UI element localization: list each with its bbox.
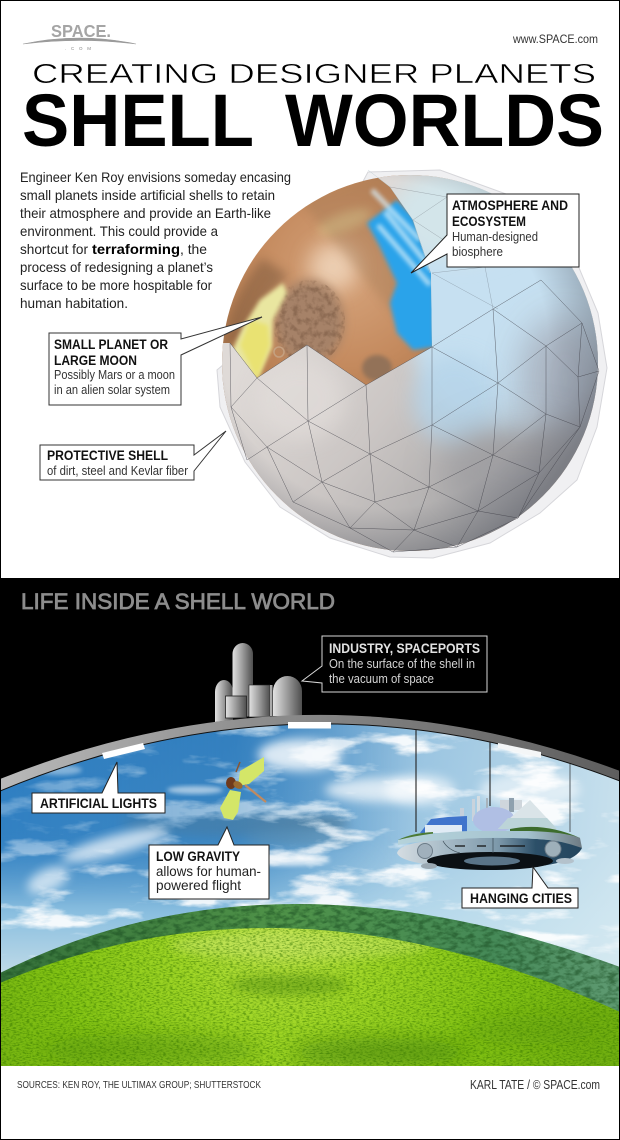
callout: industry, spaceports: INDUSTRY, SPACEPORTS — [329, 641, 480, 656]
inner ring edge line — [0, 724, 620, 791]
callout: atmosphere and ecosystem: biosphere — [452, 245, 503, 259]
callout: low gravity — [149, 827, 269, 899]
callout: atmosphere and ecosystem: Human-designed — [452, 230, 538, 244]
callout: atmosphere and ecosystem — [411, 194, 579, 273]
main title: SHELL — [22, 79, 254, 162]
logo: SPACE.com: SPACE. — [51, 21, 111, 41]
intro text block: process of redesigning a planet’s — [20, 259, 213, 275]
outer shell facets — [217, 170, 607, 558]
callout: atmosphere and ecosystem: ECOSYSTEM — [452, 214, 526, 229]
intro text block: surface to be more hospitable for — [20, 277, 212, 293]
sky — [1, 724, 619, 972]
planet inside shell illustration — [216, 170, 608, 558]
website URL: www.SPACE.com — [512, 32, 598, 46]
icon: human-powered flyer — [220, 757, 266, 820]
shell mesh lines — [230, 170, 599, 552]
icon: surface industry towers — [215, 643, 302, 722]
intro text block: human habitation. — [20, 295, 128, 311]
blue sea — [367, 200, 434, 350]
callout: protective shell — [40, 431, 226, 480]
intro text block: terraforming — [92, 241, 180, 257]
callout: industry, spaceports: the vacuum of space — [329, 672, 434, 686]
logo: SPACE.com: .COM — [65, 46, 91, 51]
shell ring — [1, 714, 619, 790]
callout: artificial lights — [32, 762, 165, 813]
intro text block: environment. This could provide a — [20, 223, 218, 239]
callout: protective shell: of dirt, steel and Kevlar fiber — [47, 464, 188, 478]
sky, clouds and ground photo — [0, 700, 620, 1066]
footer: sources: SOURCES: KEN ROY, THE ULTIMAX GROUP; SHUTTERSTOCK — [17, 1079, 261, 1091]
intro text block: Engineer Ken Roy envisions someday encasing — [20, 169, 291, 185]
planet surface — [215, 170, 615, 560]
callout: small planet or large moon: in an alien solar system — [54, 383, 170, 397]
callout: industry, spaceports — [302, 636, 487, 692]
intro text block: their atmosphere and provide an Earth-like — [20, 205, 271, 221]
callout: industry, spaceports: On the surface of the shell in — [329, 657, 475, 671]
callout: low gravity: allows for human- — [156, 863, 261, 879]
main title — [22, 79, 604, 162]
intro text block: shortcut for — [20, 241, 88, 257]
intro text block: , the — [180, 241, 207, 257]
panel: life inside a shell world — [0, 578, 620, 1066]
shell panels — [222, 175, 598, 551]
callout: low gravity: LOW GRAVITY — [156, 849, 240, 864]
hanging city cables — [416, 729, 570, 832]
main title: WORLDS — [285, 79, 604, 162]
callout: artificial lights: ARTIFICIAL LIGHTS — [40, 796, 157, 811]
distant forest — [1, 904, 619, 1012]
intro text block: small planets inside artificial shells to retain — [20, 187, 275, 203]
callout: small planet or large moon — [49, 317, 262, 405]
callout: hanging cities: HANGING CITIES — [470, 891, 572, 906]
section heading: LIFE INSIDE A SHELL WORLD — [21, 589, 335, 614]
crater terrain — [270, 280, 392, 381]
callout: atmosphere and ecosystem: ATMOSPHERE AND — [452, 198, 568, 213]
callout: small planet or large moon: LARGE MOON — [54, 353, 137, 368]
callout: hanging cities — [462, 867, 578, 908]
ring lights — [102, 722, 541, 759]
intro text block — [20, 169, 291, 311]
yellow terrain — [231, 283, 287, 380]
icon: hanging city — [397, 796, 582, 870]
callout: low gravity: powered flight — [156, 877, 241, 893]
title line one: CREATING DESIGNER PLANETS — [32, 58, 596, 89]
callout: small planet or large moon: Possibly Mars or a moon — [54, 368, 175, 382]
callout: protective shell: PROTECTIVE SHELL — [47, 448, 168, 463]
grass meadow — [0, 920, 620, 1066]
logo: SPACE.com — [23, 21, 136, 51]
callout: small planet or large moon: SMALL PLANET OR — [54, 337, 168, 352]
